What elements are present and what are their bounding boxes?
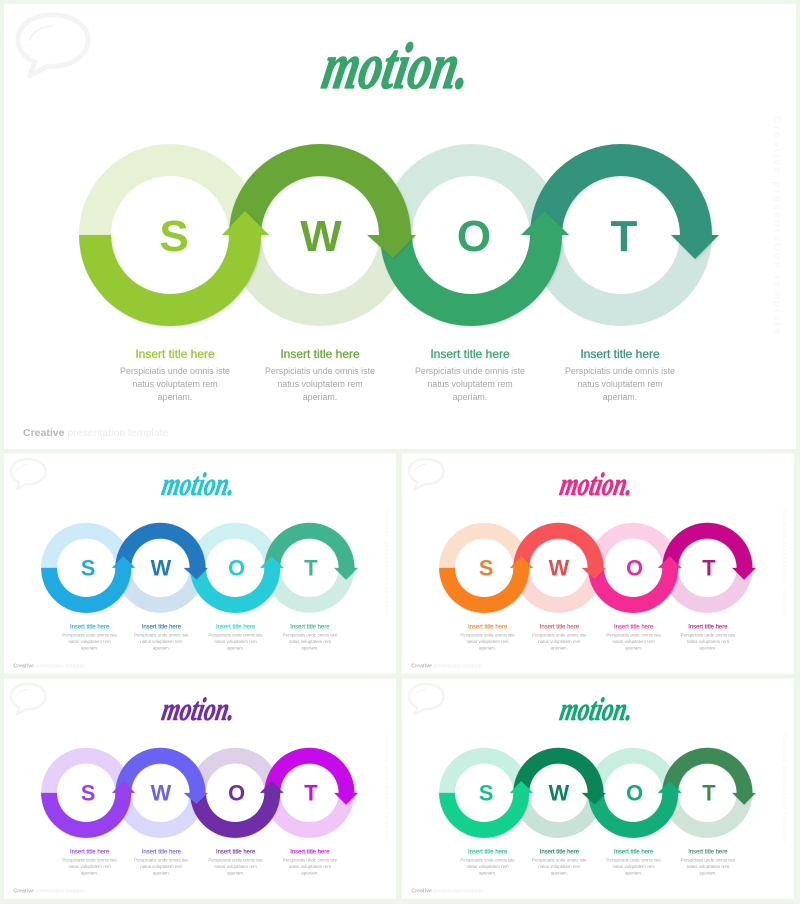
text block T: natus voluptatem rem [289,639,331,644]
letter O: O [626,556,643,581]
arrow T [530,144,719,259]
text block S: natus voluptatem rem [132,379,218,389]
icon: speech bubble [11,459,46,489]
panel: blue SWOT slide [4,453,396,674]
text block S: Insert title here [70,850,110,856]
text block T: natus voluptatem rem [289,864,331,869]
letter T: T [611,212,638,261]
SWOT chain diagram [439,748,756,838]
letter S: S [81,556,95,581]
text block T: Perspiciatis unde omnis iste [283,633,338,638]
text block T: aperiam. [301,645,318,650]
text block W: Insert title here [540,850,580,856]
footer caption: Creative presentation template [13,888,85,894]
text block O: Insert title here [216,850,256,856]
text block S [460,850,515,876]
letter W: W [151,781,172,806]
text block T: natus voluptatem rem [577,379,663,389]
text block T [565,347,675,402]
text block S: natus voluptatem rem [68,639,111,644]
text block T: Perspiciatis unde omnis iste [681,633,736,638]
side caption: Creative presentation template [781,509,787,618]
text block T: Perspiciatis unde omnis iste [681,858,736,863]
text block W: aperiam. [551,870,568,875]
letter O: O [457,212,491,261]
text block T: Insert title here [290,850,330,856]
arrow T [662,748,756,805]
text block O: Perspiciatis unde omnis iste [208,633,263,638]
text block W: natus voluptatem rem [538,639,581,644]
panel: pink SWOT slide [402,453,794,674]
text block O: Perspiciatis unde omnis iste [606,858,661,863]
panel: emerald SWOT slide [402,678,794,899]
title: motion: motion. [317,31,477,103]
text block W: Perspiciatis unde omnis iste [134,633,189,638]
footer caption: Creative presentation template [23,427,169,439]
text block S: natus voluptatem rem [466,639,509,644]
arrow O [380,211,569,326]
letter T: T [304,556,318,581]
arrow S [439,556,533,613]
footer caption: Creative presentation template [411,888,483,894]
text block W: aperiam. [303,392,337,402]
text block W [134,625,189,650]
icon: speech bubble [11,684,46,714]
text block T: Insert title here [688,850,728,856]
letter S: S [479,556,493,581]
letter S: S [479,781,493,806]
text block S: aperiam. [479,870,496,875]
text block S: Perspiciatis unde omnis iste [120,366,230,376]
text block O: Insert title here [216,625,256,631]
text block S: natus voluptatem rem [466,864,509,869]
text block S: natus voluptatem rem [68,864,111,869]
text block W: Insert title here [142,850,182,856]
text block S: Perspiciatis unde omnis iste [460,858,515,863]
arrow W [115,523,208,579]
text block S: aperiam. [81,870,98,875]
title: motion: motion. [557,467,636,503]
text block O: natus voluptatem rem [613,864,655,869]
text block T: aperiam. [699,645,716,650]
text block W [265,347,375,402]
letter O: O [228,556,245,581]
text block W: natus voluptatem rem [538,864,581,869]
letter O: O [626,781,643,806]
text block W [532,625,587,650]
text block W: Perspiciatis unde omnis iste [134,858,189,863]
text block T: aperiam. [603,392,637,402]
text block O: Insert title here [614,625,654,631]
letter S: S [81,781,95,806]
text block O: aperiam. [625,645,642,650]
letter T: T [702,556,716,581]
title: motion: motion. [557,692,636,728]
text block W: Insert title here [142,625,182,631]
arrow W [229,144,416,258]
text block S [460,625,515,650]
text block T: Perspiciatis unde omnis iste [283,858,338,863]
text block W: Perspiciatis unde omnis iste [532,858,587,863]
arrow O [190,781,284,838]
letter W: W [300,212,342,261]
SWOT chain diagram [41,748,358,838]
text block S: Insert title here [70,625,110,631]
icon: speech bubble [18,15,88,76]
text block T [681,625,736,650]
text block O [606,850,661,876]
text block O: Perspiciatis unde omnis iste [606,633,661,638]
side caption: Creative presentation template [383,509,389,618]
text block O [208,625,263,650]
text block T: Insert title here [290,625,330,631]
text block S [120,347,230,402]
text block O [208,850,263,876]
panel: main green SWOT slide [4,4,796,449]
letter O: O [228,781,245,806]
text block O: Perspiciatis unde omnis iste [208,858,263,863]
arrow W [513,748,606,804]
text block S: Perspiciatis unde omnis iste [62,858,117,863]
arrow W [115,748,208,804]
arrow W [513,523,606,579]
text block W: Perspiciatis unde omnis iste [532,633,587,638]
text block W: natus voluptatem rem [140,864,183,869]
text block O [415,347,525,402]
text block O: natus voluptatem rem [215,639,257,644]
arrow S [41,781,135,838]
text block T [283,625,338,650]
arrow S [41,556,135,613]
footer caption: Creative presentation template [13,663,85,669]
text block T: aperiam. [699,870,716,875]
text block O: natus voluptatem rem [613,639,655,644]
text block S: Perspiciatis unde omnis iste [62,633,117,638]
text block T: aperiam. [301,870,318,875]
text block T: Insert title here [580,347,660,361]
text block O: aperiam. [625,870,642,875]
arrow O [588,781,682,838]
text block T [283,850,338,876]
text block W: Perspiciatis unde omnis iste [265,366,375,376]
text block O: aperiam. [453,392,487,402]
text block S: Insert title here [468,625,508,631]
arrow S [439,781,533,838]
text block W: natus voluptatem rem [277,379,363,389]
text block T [681,850,736,876]
arrow T [662,523,756,580]
text block O [606,625,661,650]
arrow O [588,556,682,613]
SWOT chain diagram [439,523,756,613]
text block W: natus voluptatem rem [140,639,183,644]
text block W [134,850,189,876]
text block T: natus voluptatem rem [687,864,729,869]
text block W: Insert title here [540,625,580,631]
title: motion: motion. [159,467,238,503]
text block T: natus voluptatem rem [687,639,729,644]
letter W: W [549,781,570,806]
text block O: aperiam. [227,870,244,875]
letter W: W [549,556,570,581]
icon: speech bubble [409,459,444,489]
text block S: aperiam. [479,645,496,650]
side caption: Creative presentation template [383,734,389,843]
side caption: Creative presentation template [771,116,783,337]
arrow T [264,523,358,580]
text block T: Insert title here [688,625,728,631]
text block O: Perspiciatis unde omnis iste [415,366,525,376]
text block S: Insert title here [468,850,508,856]
text block S: Perspiciatis unde omnis iste [460,633,515,638]
arrow O [190,556,284,613]
letter T: T [304,781,318,806]
text block W [532,850,587,876]
SWOT chain diagram [41,523,358,613]
letter T: T [702,781,716,806]
text block S [62,850,117,876]
text block O: natus voluptatem rem [215,864,257,869]
text block W: aperiam. [153,645,170,650]
arrow S [79,211,269,326]
side caption: Creative presentation template [781,734,787,843]
text block O: natus voluptatem rem [427,379,513,389]
footer caption: Creative presentation template [411,663,483,669]
icon: speech bubble [409,684,444,714]
arrow T [264,748,358,805]
letter W: W [151,556,172,581]
text block O: Insert title here [614,850,654,856]
title: motion: motion. [159,692,238,728]
text block S [62,625,117,650]
text block O: aperiam. [227,645,244,650]
text block S: aperiam. [81,645,98,650]
text block W: aperiam. [153,870,170,875]
text block S: aperiam. [158,392,192,402]
text block T: Perspiciatis unde omnis iste [565,366,675,376]
text block S: Insert title here [135,347,215,361]
text block W: aperiam. [551,645,568,650]
text block O: Insert title here [430,347,510,361]
SWOT chain diagram [79,144,719,326]
text block W: Insert title here [280,347,360,361]
panel: purple SWOT slide [4,678,396,899]
letter S: S [159,212,189,261]
